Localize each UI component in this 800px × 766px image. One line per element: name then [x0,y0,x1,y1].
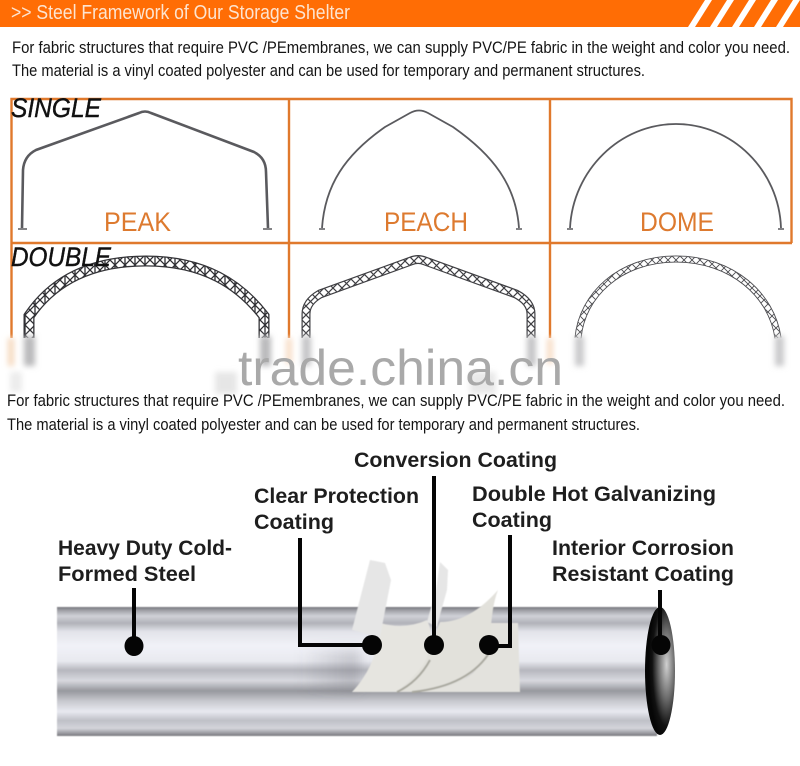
coated steel pipe [57,560,675,736]
shadow beside peel [300,650,360,690]
callout dots [124,635,670,656]
frame labels: DOME [640,207,714,237]
callout leaders [134,476,660,646]
row label: single: SINGLE [11,93,102,123]
frame labels: PEAK [104,207,171,237]
coating labels: Coating [472,508,552,532]
header title: >> Steel Framework of Our Storage Shelter [11,2,350,24]
coating labels [58,448,734,586]
coating labels: Clear Protection [254,484,419,508]
peeled coating layers [352,560,520,692]
second paragraph: The material is a vinyl coated polyester and can be used for temporary and permanent structures. [7,416,640,434]
watermark: trade.china.cn [238,340,563,396]
frame labels [104,207,714,237]
coating labels: Coating [254,510,334,534]
frame labels: PEACH [384,207,468,237]
second paragraph [7,392,785,434]
pipe body [57,607,657,736]
intro paragraph [12,39,790,80]
single dome frame [567,124,784,229]
row label: double: DOUBLE [11,242,112,272]
faded image seam [0,334,800,394]
coating labels: Formed Steel [58,562,196,586]
double arch truss [29,261,264,338]
single peak frame [18,112,272,229]
pipe bore [645,607,675,735]
intro paragraph: The material is a vinyl coated polyester and can be used for temporary and permanent structures. [12,62,645,80]
header banner [0,0,800,27]
coating labels: Conversion Coating [354,448,557,472]
double peak truss [306,260,531,338]
double dome truss [578,259,778,338]
coating labels: Interior Corrosion [552,536,734,560]
coating labels: Resistant Coating [552,562,734,586]
coating labels: Double Hot Galvanizing [472,482,716,506]
frame type grid [11,99,792,338]
single peach frame [319,110,522,229]
coating labels: Heavy Duty Cold- [58,536,232,560]
